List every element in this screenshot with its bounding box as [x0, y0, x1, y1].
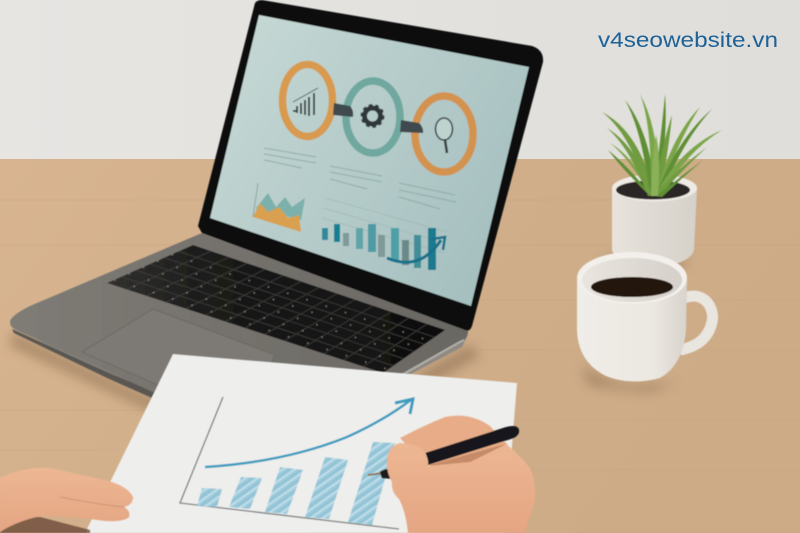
- laptop: [10, 0, 543, 398]
- pen barrel: [425, 426, 519, 465]
- laptop screen: [210, 15, 529, 306]
- front lip highlight: [400, 340, 464, 376]
- keyboard: [107, 245, 445, 373]
- trackpad: [82, 309, 275, 386]
- mug body: [577, 280, 687, 382]
- screen: trend arrow: [387, 237, 445, 262]
- screen: orange ring chart: [282, 64, 332, 136]
- plant pot: [602, 94, 722, 268]
- paper axes: [180, 397, 399, 529]
- screen: orange magnifier ring: [415, 96, 473, 172]
- wooden table: [0, 159, 800, 533]
- plant leaves: [602, 94, 722, 197]
- coffee: [591, 277, 673, 297]
- paper sheet with chart: [86, 354, 517, 533]
- paper bars: [197, 442, 395, 525]
- paper growth arrow: [205, 399, 413, 467]
- back finger: [400, 416, 508, 475]
- screen: connector one: [333, 103, 353, 117]
- hand front: [387, 443, 535, 533]
- screen: teal gear ring: [346, 81, 400, 153]
- pen nib: [368, 473, 384, 475]
- table shadows: [10, 250, 690, 410]
- mug handle: [680, 296, 713, 350]
- screen: bar chart: [322, 198, 447, 270]
- screen: blurred text lines: [264, 148, 456, 209]
- pen tip grip: [380, 469, 393, 479]
- laptop base deck: [10, 233, 468, 392]
- brand text: v4seowebsite.vn: [598, 29, 778, 52]
- laptop base underside: [10, 236, 468, 397]
- pen shadow on hand: [430, 444, 505, 476]
- coffee mug: [577, 252, 713, 382]
- left hand: [0, 468, 133, 533]
- right hand with pen: [368, 416, 535, 533]
- front edge shadow: [12, 329, 155, 398]
- laptop lid: [198, 0, 543, 330]
- background wall: [0, 0, 800, 161]
- screen: area chart: [253, 183, 305, 232]
- screen: connector two: [400, 120, 423, 133]
